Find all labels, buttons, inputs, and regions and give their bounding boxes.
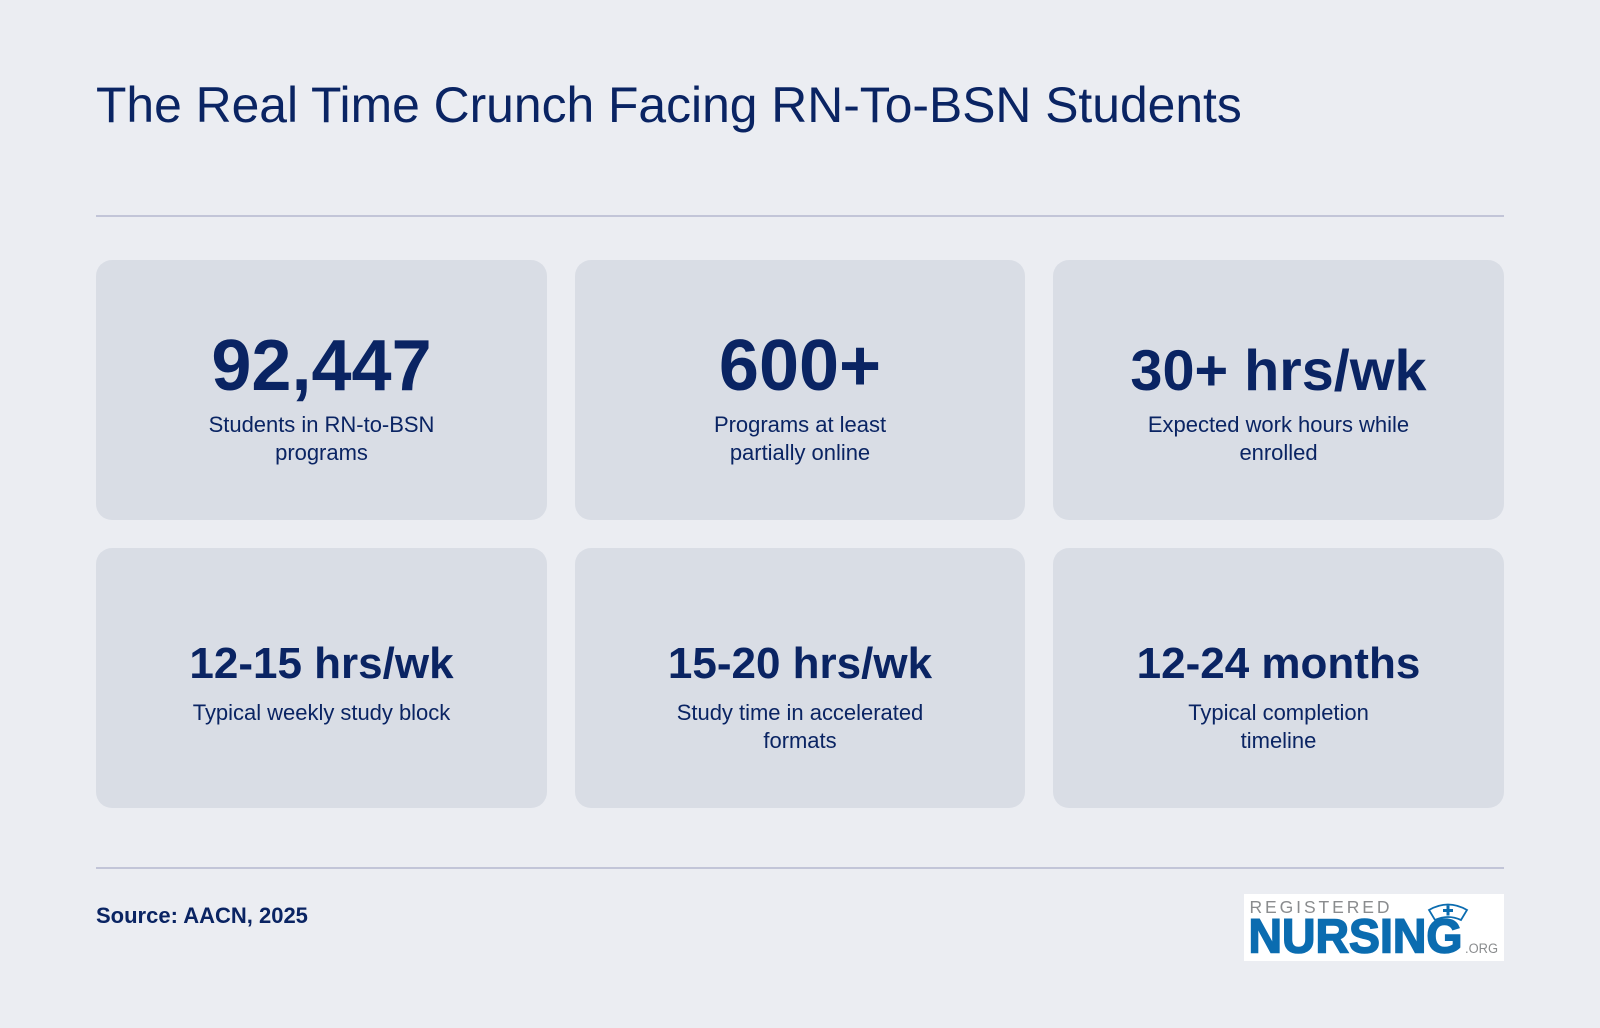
logo: RegisteredNursing.org: REGISTERED [1250, 897, 1390, 917]
stat label: partially online [730, 440, 870, 465]
logo: RegisteredNursing.org [1244, 894, 1504, 961]
stat label [677, 700, 923, 753]
stat label: Students in RN-to-BSN [209, 412, 434, 437]
stat value: 92,447 [211, 326, 432, 406]
stat value: 600+ [719, 326, 881, 406]
stat value: 15-20 hrs/wk [668, 639, 932, 688]
stat label [1188, 700, 1369, 753]
panel: programs stat [575, 260, 1025, 520]
stat label: timeline [1241, 728, 1316, 753]
stat label: formats [763, 728, 837, 753]
stat value: 30+ hrs/wk [1130, 339, 1427, 403]
stat label: Programs at least [714, 412, 886, 437]
title: The Real Time Crunch Facing RN-To-BSN Students [96, 77, 1242, 133]
stat label [209, 412, 434, 465]
stat label: Expected work hours while [1148, 412, 1409, 437]
panel: students stat [96, 260, 547, 520]
stat label: programs [275, 440, 368, 465]
stat label: Typical completion [1188, 700, 1369, 725]
stat value: 12-24 months [1137, 639, 1420, 688]
panel: completion timeline stat [1053, 548, 1504, 808]
icon: nurse cap [1429, 904, 1467, 920]
stat label [714, 412, 886, 465]
logo: RegisteredNursing.org: .ORG [1465, 941, 1498, 956]
stat label: Study time in accelerated [677, 700, 923, 725]
source note: Source: AACN, 2025 [96, 903, 308, 928]
panel: weekly study stat [96, 548, 547, 808]
panel: work hours stat [1053, 260, 1504, 520]
stat label: Typical weekly study block [193, 700, 450, 725]
stat label: enrolled [1239, 440, 1318, 465]
panel: accelerated study stat [575, 548, 1025, 808]
stat value: 12-15 hrs/wk [189, 639, 454, 688]
stat label [1148, 412, 1409, 465]
